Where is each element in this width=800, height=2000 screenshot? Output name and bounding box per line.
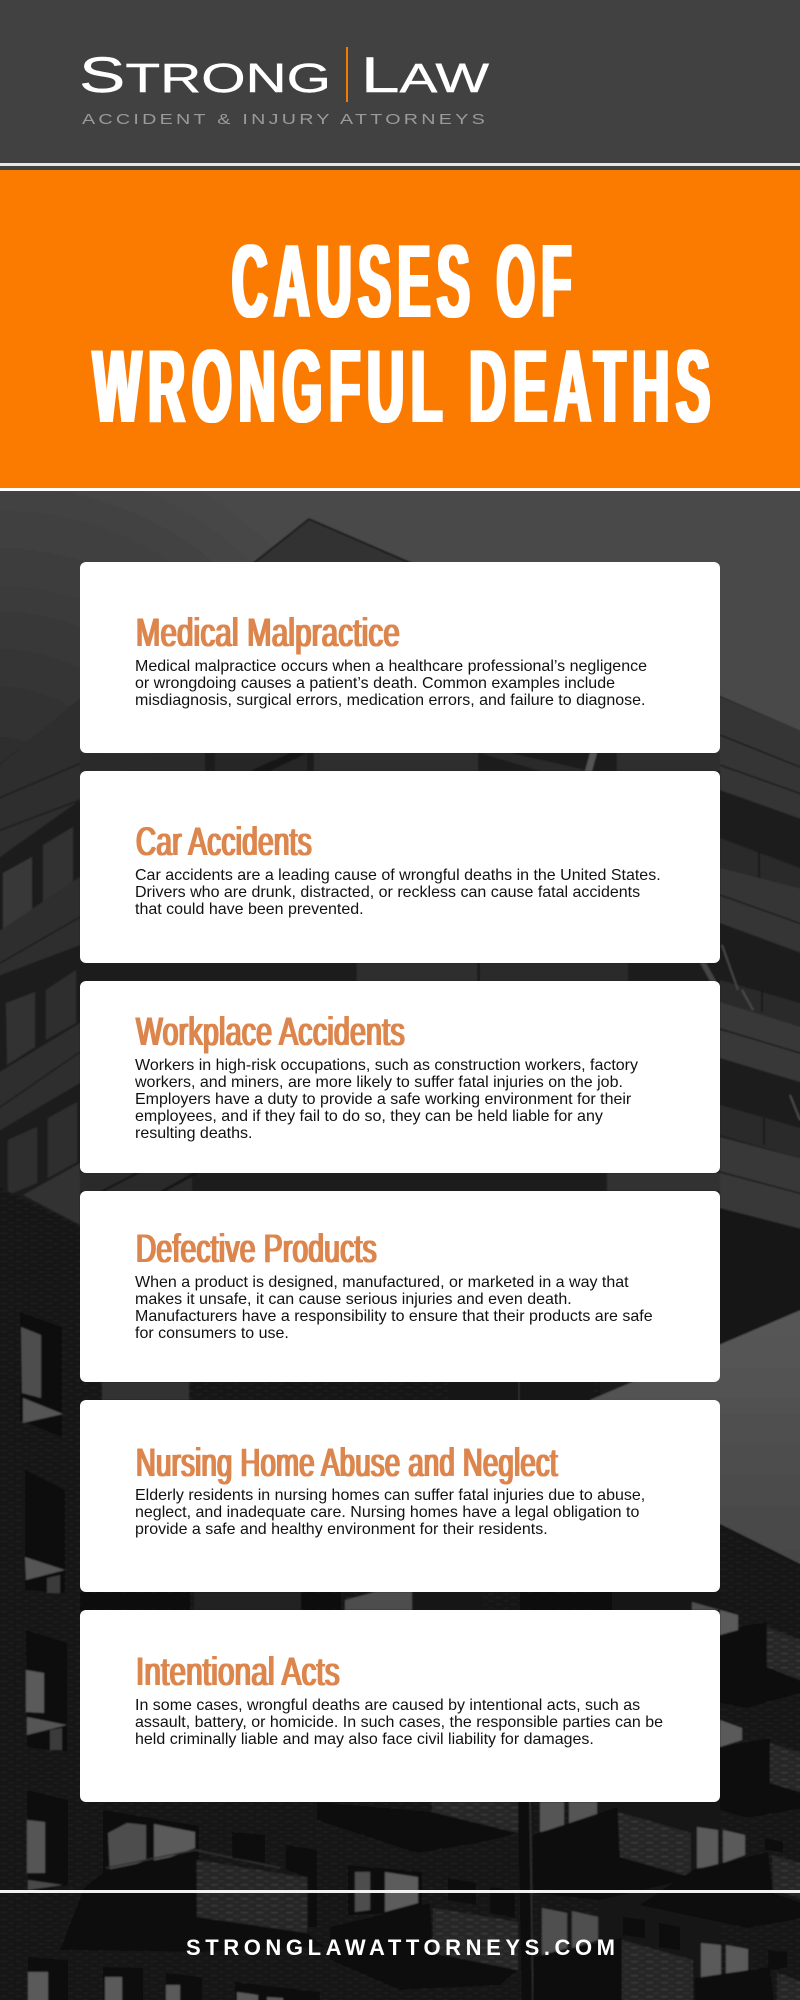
logo wordmark: Law: L AW (361, 47, 489, 103)
body text: defective products: makes it unsafe, it can cause serious injuries and even death. (135, 1291, 572, 1308)
heading: medical malpractice: Medical Malpractice (136, 611, 400, 655)
heading: workplace accidents: Workplace Accidents (136, 1010, 405, 1054)
body text: defective products: Manufacturers have a responsibility to ensure that their products are safe (135, 1308, 653, 1325)
heading: defective products: Defective Products (136, 1227, 377, 1271)
panel: car accidents (80, 771, 720, 963)
footer rule (0, 1890, 800, 1893)
heading: car accidents: Car Accidents (136, 820, 312, 864)
body text: intentional acts: held criminally liable and may also face civil liability for damages. (135, 1731, 594, 1748)
background photo: apartment building (0, 480, 800, 2000)
body text: car accidents: Car accidents are a leading cause of wrongful deaths in the United States. (135, 867, 661, 884)
logo divider (346, 47, 348, 102)
body text: intentional acts: assault, battery, or homicide. In such cases, the responsible parties can be (135, 1714, 663, 1731)
body text: workplace accidents: resulting deaths. (135, 1125, 252, 1142)
panel: medical malpractice (80, 562, 720, 753)
logo: Strong Law (79, 47, 489, 128)
banner rule (0, 488, 800, 491)
body text: workplace accidents: Workers in high-risk occupations, such as construction workers, factory (135, 1057, 638, 1074)
logo tagline: ACCIDENT & INJURY ATTORNEYS (82, 111, 488, 128)
body text: medical malpractice: or wrongdoing causes a patient’s death. Common examples include (135, 675, 615, 692)
body text: car accidents: Drivers who are drunk, distracted, or reckless can cause fatal accidents (135, 884, 640, 901)
body text: car accidents: that could have been prevented. (135, 901, 364, 918)
body text: intentional acts: In some cases, wrongful deaths are caused by intentional acts, such as (135, 1697, 640, 1714)
body text: nursing home abuse and neglect: neglect, and inadequate care. Nursing homes have a legal obligation to (135, 1504, 639, 1521)
body text: workplace accidents: Employers have a duty to provide a safe working environment for their (135, 1091, 632, 1108)
logo wordmark: Strong: S TRONG (79, 47, 331, 103)
body text: defective products: When a product is designed, manufactured, or marketed in a way that (135, 1274, 629, 1291)
body text: workplace accidents: employees, and if they fail to do so, they can be held liable for any (135, 1108, 603, 1125)
panel: workplace accidents (80, 981, 720, 1173)
panel: defective products (80, 1191, 720, 1382)
panel: nursing home abuse and neglect (80, 1400, 720, 1592)
title banner (0, 170, 800, 488)
body text: medical malpractice: Medical malpractice occurs when a healthcare professional’s negligence (135, 658, 647, 675)
body text: defective products: for consumers to use. (135, 1325, 289, 1342)
header band (0, 0, 800, 170)
heading: nursing home abuse and neglect: Nursing Home Abuse and Neglect (136, 1441, 558, 1485)
header rule (0, 163, 800, 166)
panel: intentional acts (80, 1610, 720, 1802)
body text: workplace accidents: workers, and miners, are more likely to suffer fatal injuries on the job. (134, 1074, 623, 1091)
heading: intentional acts: Intentional Acts (136, 1650, 340, 1694)
body text: nursing home abuse and neglect: provide a safe and healthy environment for their residents. (135, 1521, 548, 1538)
body text: medical malpractice: misdiagnosis, surgical errors, medication errors, and failure to diagnose. (135, 692, 645, 709)
body text: nursing home abuse and neglect: Elderly residents in nursing homes can suffer fatal injuries due to abuse, (135, 1487, 645, 1504)
footer website: STRONGLAWATTORNEYS.COM (186, 1935, 615, 1960)
